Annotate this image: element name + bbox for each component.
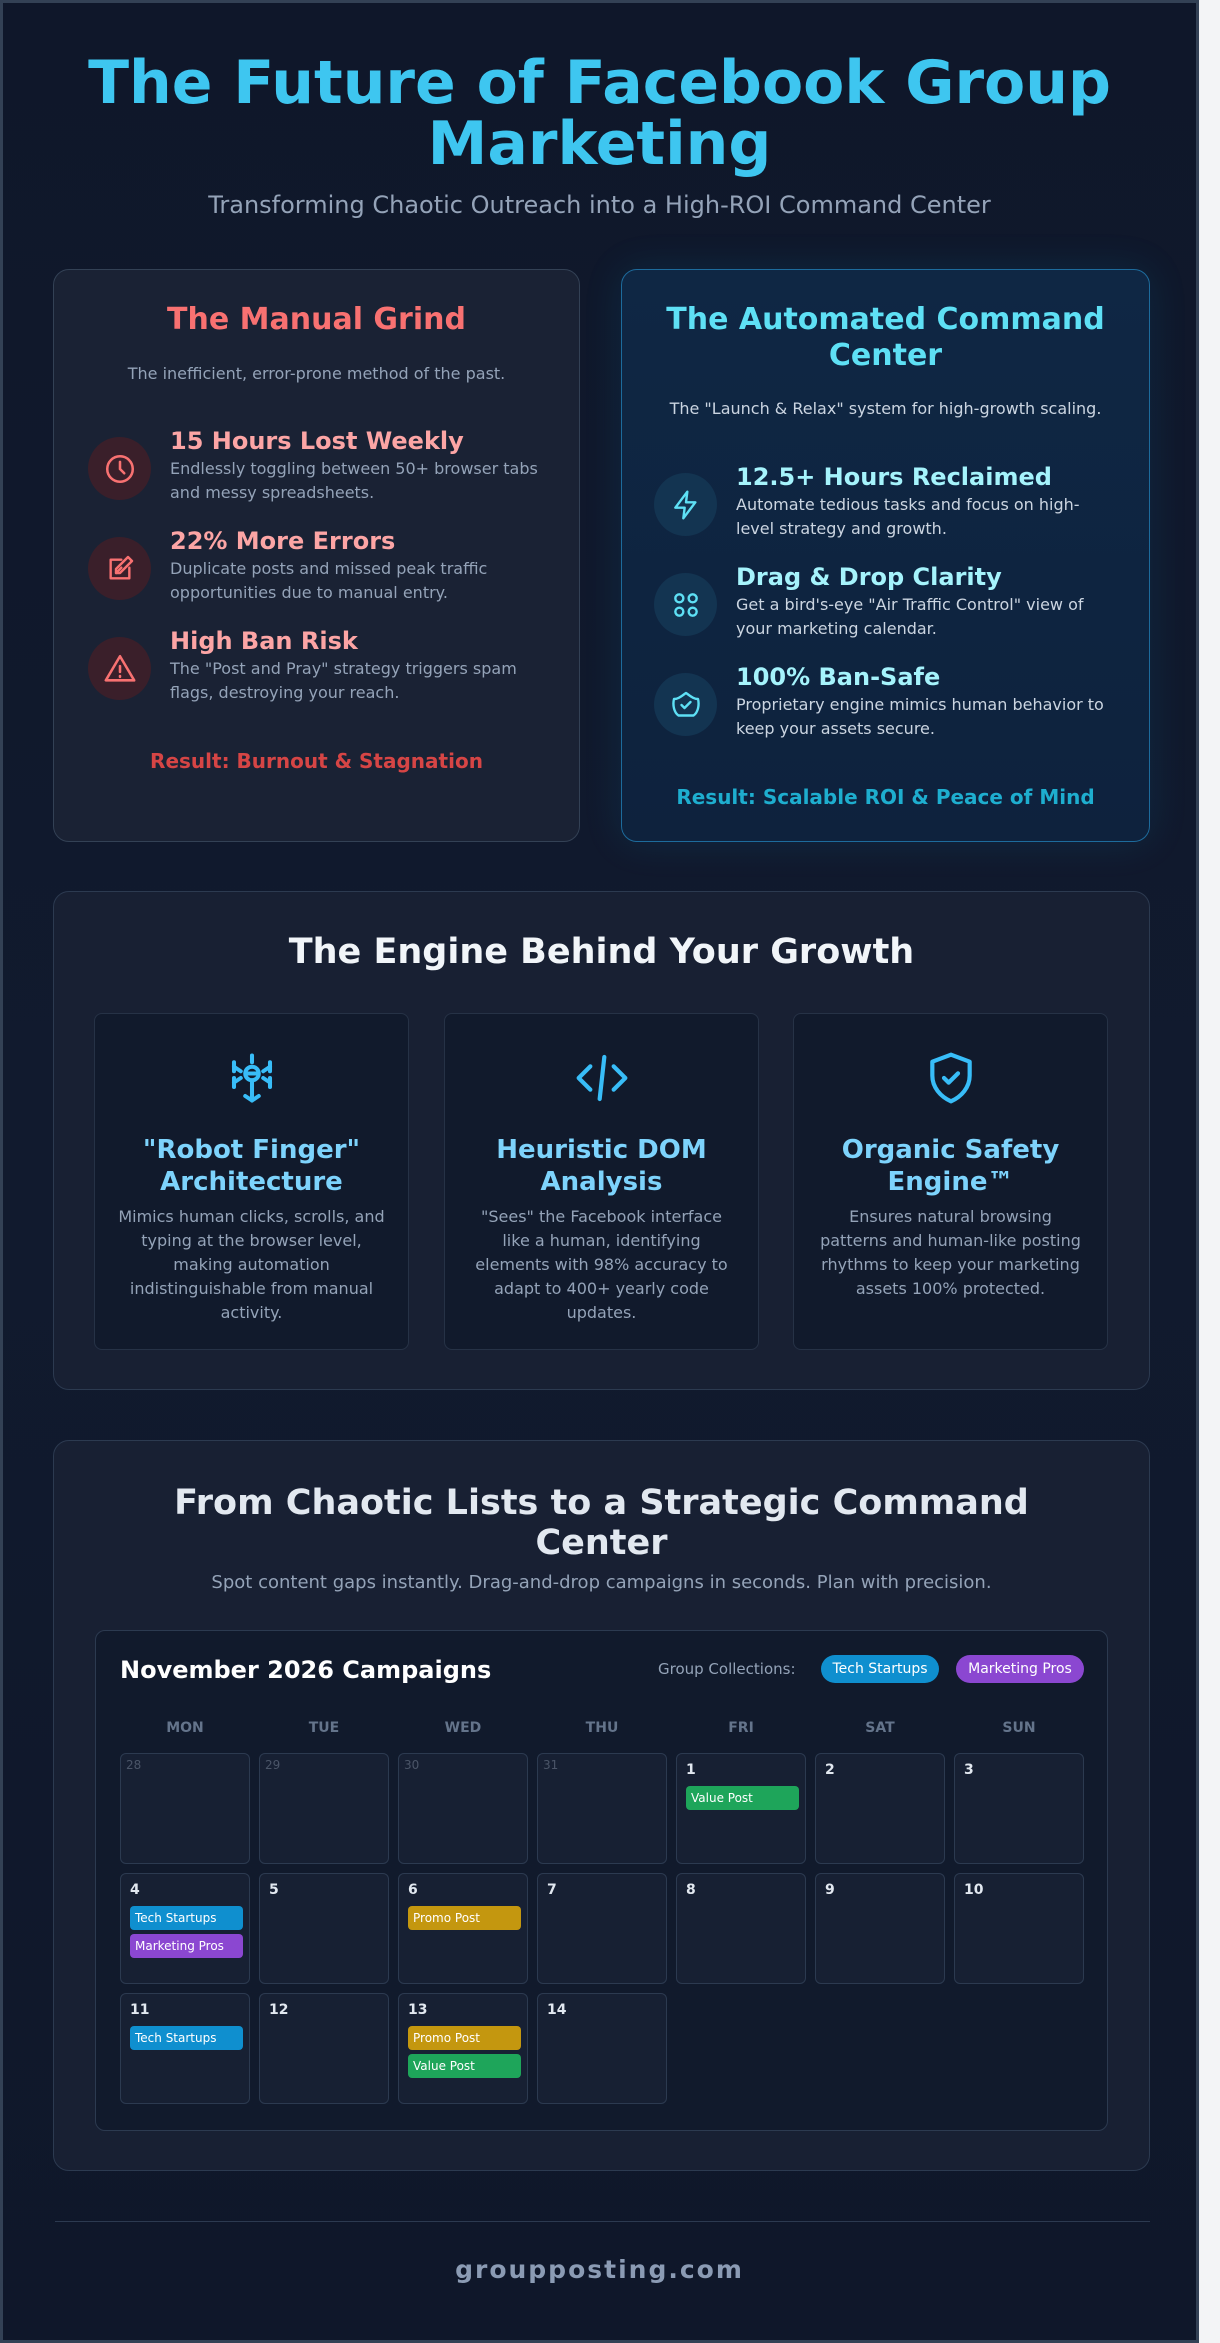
legend: group collections: Marketing Pros [968, 1661, 1072, 1677]
heading: manual grind: The Manual Grind [167, 302, 466, 337]
heading: engine: The Engine Behind Your Growth [289, 932, 914, 972]
item: ban safe: Proprietary engine mimics human behavior to keep your assets secure. [736, 695, 1104, 738]
item: errors [88, 527, 487, 602]
heading: automated: Center [829, 338, 942, 373]
calendar grid: Value Post [413, 2059, 475, 2073]
day headers: FRI [728, 1720, 754, 1736]
panel: manual grind [53, 269, 580, 842]
card: robot finger: Mimics human clicks, scrolls, and typing at the browser level, making automation indistinguishable from manual activity. [118, 1207, 385, 1322]
card: robot finger: "Robot Finger" [143, 1135, 360, 1165]
card: organic safety [793, 1013, 1108, 1350]
item: drag and drop: Get a bird's-eye "Air Traffic Control" view of your marketing calendar. [736, 595, 1084, 638]
item: hours reclaimed: 12.5+ Hours Reclaimed [736, 463, 1052, 491]
calendar grid: Tech Startups [135, 1911, 216, 1925]
legend: group collections [658, 1655, 1084, 1683]
day headers: SUN [1002, 1720, 1036, 1736]
calendar grid: 2 [825, 1762, 835, 1778]
card: organic safety: Ensures natural browsing patterns and human-like posting rhythms to keep your marketing assets 100% protected. [820, 1207, 1081, 1298]
icon: robot finger [232, 1054, 272, 1103]
legend: group collections: Group Collections: [658, 1660, 796, 1678]
result: manual: Result: Burnout & Stagnation [150, 749, 483, 773]
item: hours lost: Endlessly toggling between 50+ browser tabs and messy spreadsheets. [170, 459, 538, 502]
item: drag and drop [654, 563, 1084, 638]
title [88, 48, 1111, 179]
item: hours reclaimed [654, 463, 1080, 538]
heading: calendar section [174, 1483, 1029, 1563]
title: Marketing [428, 109, 771, 179]
item: errors: 22% More Errors [170, 527, 395, 555]
item: ban risk: High Ban Risk [170, 627, 358, 655]
item: drag and drop: Drag & Drop Clarity [736, 563, 1002, 591]
calendar grid: 1 [686, 1762, 696, 1778]
item: errors: Duplicate posts and missed peak traffic opportunities due to manual entry. [170, 559, 487, 602]
card: organic safety: Engine™ [888, 1167, 1013, 1197]
calendar grid: 10 [964, 1882, 983, 1898]
subtitle: Transforming Chaotic Outreach into a High-ROI Command Center [208, 191, 991, 219]
card: robot finger: Architecture [160, 1167, 343, 1197]
calendar grid: 5 [269, 1882, 279, 1898]
heading: calendar month: November 2026 Campaigns [120, 1656, 491, 1684]
icon: clock [88, 437, 151, 500]
item: hours lost [88, 427, 538, 502]
item: ban safe [654, 663, 1104, 738]
calendar grid: Marketing Pros [135, 1939, 224, 1953]
calendar grid: 3 [964, 1762, 974, 1778]
item: ban risk: The "Post and Pray" strategy triggers spam flags, destroying your reach. [170, 659, 517, 702]
title: The Future of Facebook Group [88, 48, 1111, 118]
item: hours reclaimed: Automate tedious tasks and focus on high-level strategy and growth. [736, 495, 1080, 538]
calendar grid: Promo Post [413, 2031, 480, 2045]
calendar grid: 29 [265, 1758, 280, 1772]
calendar grid: 11 [130, 2002, 149, 2018]
icon: grid [654, 573, 717, 636]
text: automated subtitle: The "Launch & Relax" system for high-growth scaling. [670, 399, 1101, 418]
calendar grid: 30 [404, 1758, 419, 1772]
icon: warning [88, 637, 151, 700]
day headers: THU [586, 1720, 618, 1736]
calendar grid: 9 [825, 1882, 835, 1898]
calendar grid: 8 [686, 1882, 696, 1898]
calendar grid: 13 [408, 2002, 427, 2018]
calendar grid: 31 [543, 1758, 558, 1772]
panel: automated command center [621, 269, 1150, 842]
calendar grid: Value Post [691, 1791, 753, 1805]
day headers: SAT [865, 1720, 895, 1736]
heading: calendar section: From Chaotic Lists to a Strategic Command [174, 1483, 1029, 1523]
calendar grid: Tech Startups [135, 2031, 216, 2045]
icon: shield badge [654, 673, 717, 736]
result: automated: Result: Scalable ROI & Peace of Mind [676, 785, 1095, 809]
calendar grid: Promo Post [413, 1911, 480, 1925]
card: heuristic dom: Analysis [541, 1167, 662, 1197]
icon: edit [88, 537, 151, 600]
footer: groupposting.com [455, 2255, 744, 2284]
calendar [95, 1630, 1108, 2131]
heading: automated: The Automated Command [666, 302, 1105, 337]
card: organic safety: Organic Safety [842, 1135, 1059, 1165]
card: heuristic dom [444, 1013, 759, 1350]
day headers: MON [166, 1720, 204, 1736]
calendar grid: 28 [126, 1758, 141, 1772]
card: robot finger [94, 1013, 409, 1350]
heading: calendar section: Center [535, 1523, 668, 1563]
text: calendar subtitle: Spot content gaps instantly. Drag-and-drop campaigns in seconds. Plan with precision. [211, 1572, 992, 1593]
day headers: TUE [309, 1720, 339, 1736]
card: heuristic dom: "Sees" the Facebook interface like a human, identifying elements with 98% accuracy to adapt to 400+ yearly code updates. [475, 1207, 728, 1322]
calendar grid [120, 1753, 1084, 2104]
icon: lightning [654, 473, 717, 536]
day headers [166, 1720, 1036, 1736]
panel: calendar section [53, 1440, 1150, 2171]
day headers: WED [445, 1720, 481, 1736]
calendar grid: 7 [547, 1882, 557, 1898]
text: manual subtitle: The inefficient, error-prone method of the past. [128, 364, 505, 383]
calendar grid: 6 [408, 1882, 418, 1898]
card: heuristic dom: Heuristic DOM [496, 1135, 707, 1165]
calendar grid: 4 [130, 1882, 140, 1898]
item: ban risk [88, 627, 517, 702]
item: hours lost: 15 Hours Lost Weekly [170, 427, 464, 455]
item: ban safe: 100% Ban-Safe [736, 663, 940, 691]
calendar grid: 12 [269, 2002, 288, 2018]
heading: automated [666, 302, 1105, 373]
icon: code [576, 1054, 628, 1102]
icon: shield check [930, 1052, 972, 1104]
panel: engine [53, 891, 1150, 1390]
legend: group collections: Tech Startups [832, 1661, 928, 1677]
calendar grid: 14 [547, 2002, 566, 2018]
